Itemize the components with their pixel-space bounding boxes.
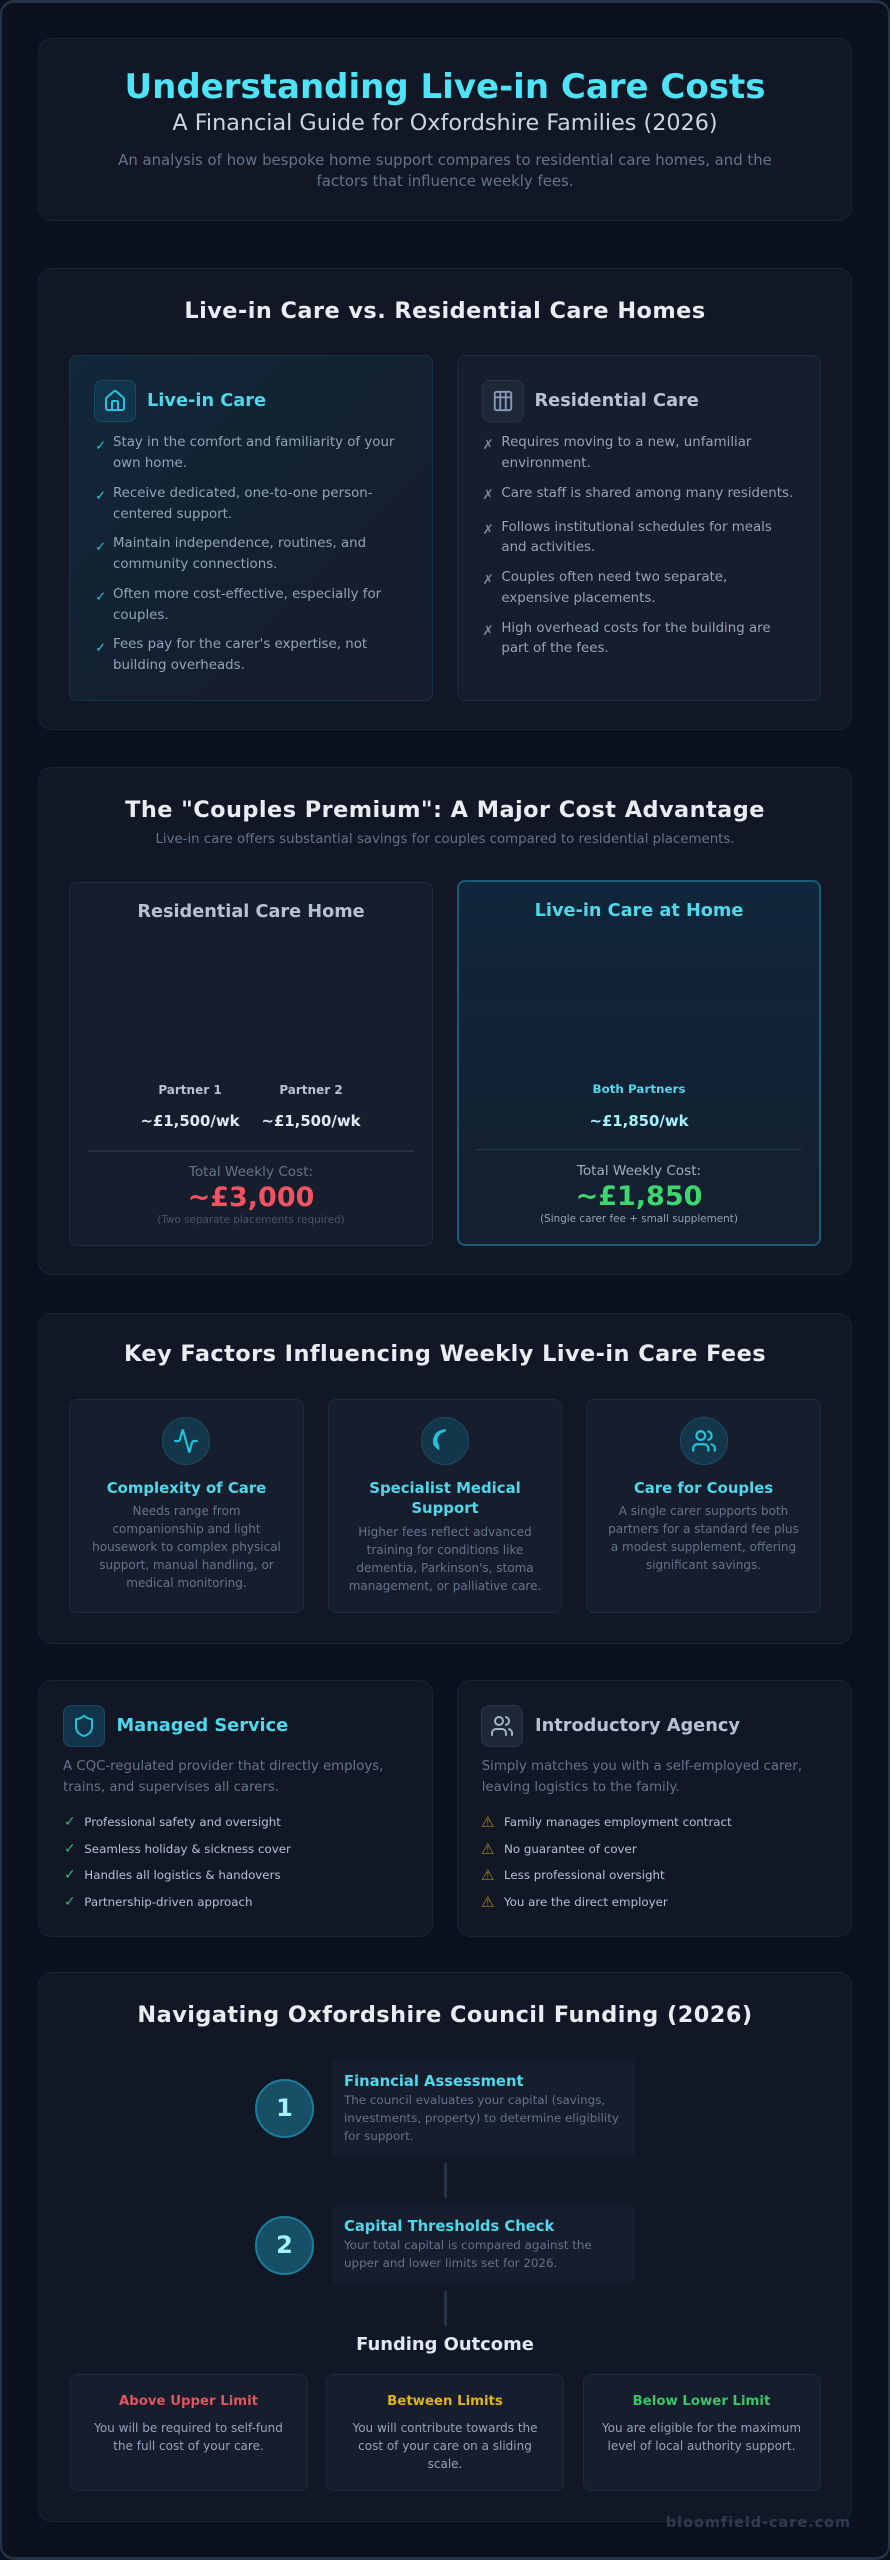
tick list: ✓ <box>95 439 106 454</box>
benefit list: ✓ <box>64 1867 76 1883</box>
outcome: between limits: Between Limits <box>387 2394 503 2409</box>
step 1 box: The council evaluates your capital (savings, <box>344 2093 605 2107</box>
benefit list: ✓ <box>64 1841 76 1857</box>
tick list: couples. <box>113 608 169 623</box>
factor title: Complexity of Care <box>107 1479 266 1497</box>
icon: home <box>94 380 136 422</box>
card title: Managed Service <box>116 1716 288 1736</box>
step 2 box <box>332 2205 635 2284</box>
cross list: ✗ <box>482 488 494 503</box>
heading: Key Factors Influencing Weekly Live-in Care Fees <box>124 1341 766 1367</box>
benefit list <box>64 1814 291 1910</box>
outcome: below lower limit <box>582 2374 820 2491</box>
panel: key factors <box>38 1313 852 1644</box>
step 1 box: Financial Assessment <box>344 2072 524 2090</box>
tick list: centered support. <box>113 507 232 522</box>
heading: Live-in Care vs. Residential Care Homes <box>184 298 706 324</box>
heading: The "Couples Premium": A Major Cost Advantage <box>125 797 765 823</box>
note: (Two separate placements required) <box>157 1214 345 1226</box>
step 1 box: for support. <box>344 2129 414 2143</box>
description: trains, and supervises all carers. <box>63 1780 279 1795</box>
benefit list: ✓ <box>64 1814 76 1830</box>
tick list: building overheads. <box>113 658 245 673</box>
card: residential cost <box>69 882 433 1246</box>
cross list: Couples often need two separate, <box>501 570 727 585</box>
step 2 box: upper and lower limits set for 2026. <box>344 2256 557 2270</box>
factor description: companionship and light <box>112 1522 261 1536</box>
warning list <box>481 1813 732 1911</box>
factor description: A single carer supports both <box>619 1504 788 1518</box>
description <box>63 1759 383 1795</box>
warning list: ⚠ <box>481 1813 494 1831</box>
description <box>482 1759 802 1795</box>
partner 1: ~£1,500/wk <box>140 1112 240 1130</box>
warning list: Family manages employment contract <box>504 1815 732 1829</box>
warning list: Less professional oversight <box>504 1868 665 1882</box>
factor description: a modest supplement, offering <box>611 1540 796 1554</box>
cross list: and activities. <box>501 540 595 555</box>
outcome: below lower limit: Below Lower Limit <box>633 2394 770 2409</box>
note: (Single carer fee + small supplement) <box>540 1213 738 1225</box>
title: Understanding Live-in Care Costs <box>125 67 765 107</box>
benefit list: Professional safety and oversight <box>84 1815 281 1829</box>
cross list: ✗ <box>482 523 494 538</box>
description: A CQC-regulated provider that directly employs, <box>63 1759 383 1774</box>
card: live-in care <box>69 355 433 701</box>
cross list: Care staff is shared among many residents. <box>501 486 793 501</box>
partner 2: Partner 2 <box>279 1083 343 1097</box>
card title: Residential Care <box>534 391 699 411</box>
factor title <box>369 1479 521 1517</box>
panel: couples premium <box>38 767 852 1275</box>
description <box>118 151 772 190</box>
icon: shield <box>63 1705 105 1747</box>
description: Simply matches you with a self-employed carer, <box>482 1759 802 1774</box>
factor description <box>608 1504 799 1572</box>
card: care for couples <box>586 1399 821 1613</box>
factor title: Specialist Medical <box>369 1479 521 1497</box>
factor description: significant savings. <box>646 1558 761 1572</box>
tick list: ✓ <box>95 540 106 555</box>
both partners: ~£1,850/wk <box>589 1112 689 1130</box>
outcome: below lower limit: level of local authority support. <box>608 2439 795 2453</box>
panel: council funding <box>38 1972 852 2522</box>
outcome: below lower limit: You are eligible for the maximum <box>602 2421 801 2435</box>
panel: header <box>38 38 852 221</box>
card title: Live-in Care at Home <box>535 901 743 921</box>
tick list: community connections. <box>113 557 277 572</box>
cross list: High overhead costs for the building are <box>501 621 771 636</box>
step 2 number <box>255 2216 314 2275</box>
total value: ~£1,850 <box>576 1181 702 1212</box>
cross list: Requires moving to a new, unfamiliar <box>501 435 751 450</box>
benefit list: Seamless holiday & sickness cover <box>84 1842 291 1856</box>
warning list: ⚠ <box>481 1866 494 1884</box>
icon: users <box>680 1417 728 1465</box>
partner 2 <box>261 1083 361 1130</box>
tick list: ✓ <box>95 489 106 504</box>
factor description <box>92 1504 281 1590</box>
description: factors that influence weekly fees. <box>316 172 574 190</box>
tick list: Receive dedicated, one-to-one person- <box>113 486 373 501</box>
step 1 box <box>332 2059 635 2157</box>
outcome: above upper limit <box>70 2374 308 2491</box>
step 1 number <box>255 2079 314 2138</box>
cross list: ✗ <box>482 624 494 639</box>
outcome: between limits: scale. <box>428 2457 462 2471</box>
tick list: Fees pay for the carer's expertise, not <box>113 637 367 652</box>
icon: stethoscope <box>421 1417 469 1465</box>
cross list <box>482 435 793 656</box>
panel: managed service <box>38 1680 433 1937</box>
factor description: management, or palliative care. <box>349 1579 541 1593</box>
outcome: above upper limit: Above Upper Limit <box>119 2394 258 2409</box>
outcome: above upper limit: the full cost of your care. <box>113 2439 264 2453</box>
factor title: Support <box>411 1499 479 1517</box>
step 2 box: Your total capital is compared against the <box>344 2238 592 2252</box>
icon: building <box>482 380 524 422</box>
partner 1: Partner 1 <box>158 1083 222 1097</box>
factor title: Care for Couples <box>634 1479 773 1497</box>
benefit list: Partnership-driven approach <box>84 1895 253 1909</box>
partner 1 <box>140 1083 240 1130</box>
cross list: ✗ <box>482 573 494 588</box>
card: residential care <box>457 355 821 701</box>
funding outcome heading: Funding Outcome <box>356 2334 534 2354</box>
both partners: Both Partners <box>593 1082 685 1096</box>
heading: Navigating Oxfordshire Council Funding (2026) <box>137 2002 753 2028</box>
cross list: Follows institutional schedules for meals <box>501 520 772 535</box>
total value: ~£3,000 <box>188 1182 314 1213</box>
benefit list: ✓ <box>64 1894 76 1910</box>
factor description: medical monitoring. <box>126 1576 247 1590</box>
warning list: ⚠ <box>481 1893 494 1911</box>
warning list: No guarantee of cover <box>504 1842 637 1856</box>
tick list: own home. <box>113 456 187 471</box>
step 2 number: 2 <box>276 2231 293 2259</box>
tick list: ✓ <box>95 590 106 605</box>
total label: Total Weekly Cost: <box>189 1164 313 1180</box>
icon: activity <box>162 1417 210 1465</box>
outcome: between limits <box>326 2374 564 2491</box>
tick list: Maintain independence, routines, and <box>113 536 366 551</box>
outcome: between limits: You will contribute towards the <box>352 2421 538 2435</box>
tick list: Often more cost-effective, especially for <box>113 587 381 602</box>
cross list: environment. <box>501 456 591 471</box>
card: complexity of care <box>69 1399 304 1613</box>
card: live-in cost <box>457 880 821 1246</box>
warning list: ⚠ <box>481 1840 494 1858</box>
outcome: between limits: cost of your care on a sliding <box>358 2439 532 2453</box>
benefit list: Handles all logistics & handovers <box>84 1868 281 1882</box>
factor description: Needs range from <box>132 1504 241 1518</box>
warning list: You are the direct employer <box>504 1895 668 1909</box>
card title: Residential Care Home <box>137 902 365 922</box>
cross list: ✗ <box>482 438 494 453</box>
card title: Introductory Agency <box>535 1716 740 1736</box>
panel: introductory agency <box>457 1680 852 1937</box>
factor description <box>349 1525 541 1593</box>
card: specialist medical support <box>328 1399 562 1613</box>
both partners <box>589 1082 689 1130</box>
icon: users <box>481 1705 523 1747</box>
step 1 number: 1 <box>276 2094 293 2122</box>
cross list: part of the fees. <box>501 641 609 656</box>
factor description: housework to complex physical <box>92 1540 281 1554</box>
outcome: above upper limit: You will be required to self-fund <box>94 2421 283 2435</box>
tick list: ✓ <box>95 641 106 656</box>
cross list: expensive placements. <box>501 591 656 606</box>
subheading: Live-in care offers substantial savings for couples compared to residential placements. <box>155 832 735 847</box>
description: leaving logistics to the family. <box>482 1780 680 1795</box>
factor description: dementia, Parkinson's, stoma <box>356 1561 534 1575</box>
card title: Live-in Care <box>147 391 266 411</box>
partner 2: ~£1,500/wk <box>261 1112 361 1130</box>
factor description: support, manual handling, or <box>99 1558 274 1572</box>
tick list: Stay in the comfort and familiarity of your <box>113 435 394 450</box>
step 1 box: investments, property) to determine eligibility <box>344 2111 619 2125</box>
tick list <box>95 435 394 673</box>
subtitle: A Financial Guide for Oxfordshire Families (2026) <box>172 110 718 136</box>
factor description: Higher fees reflect advanced <box>358 1525 532 1539</box>
total label: Total Weekly Cost: <box>577 1163 701 1179</box>
factor description: partners for a standard fee plus <box>608 1522 799 1536</box>
description: An analysis of how bespoke home support compares to residential care homes, and the <box>118 151 772 169</box>
panel: live-in vs residential comparison <box>38 268 852 730</box>
step 2 box: Capital Thresholds Check <box>344 2218 554 2235</box>
factor description: training for conditions like <box>367 1543 523 1557</box>
watermark: bloomfield-care.com <box>666 2515 851 2531</box>
